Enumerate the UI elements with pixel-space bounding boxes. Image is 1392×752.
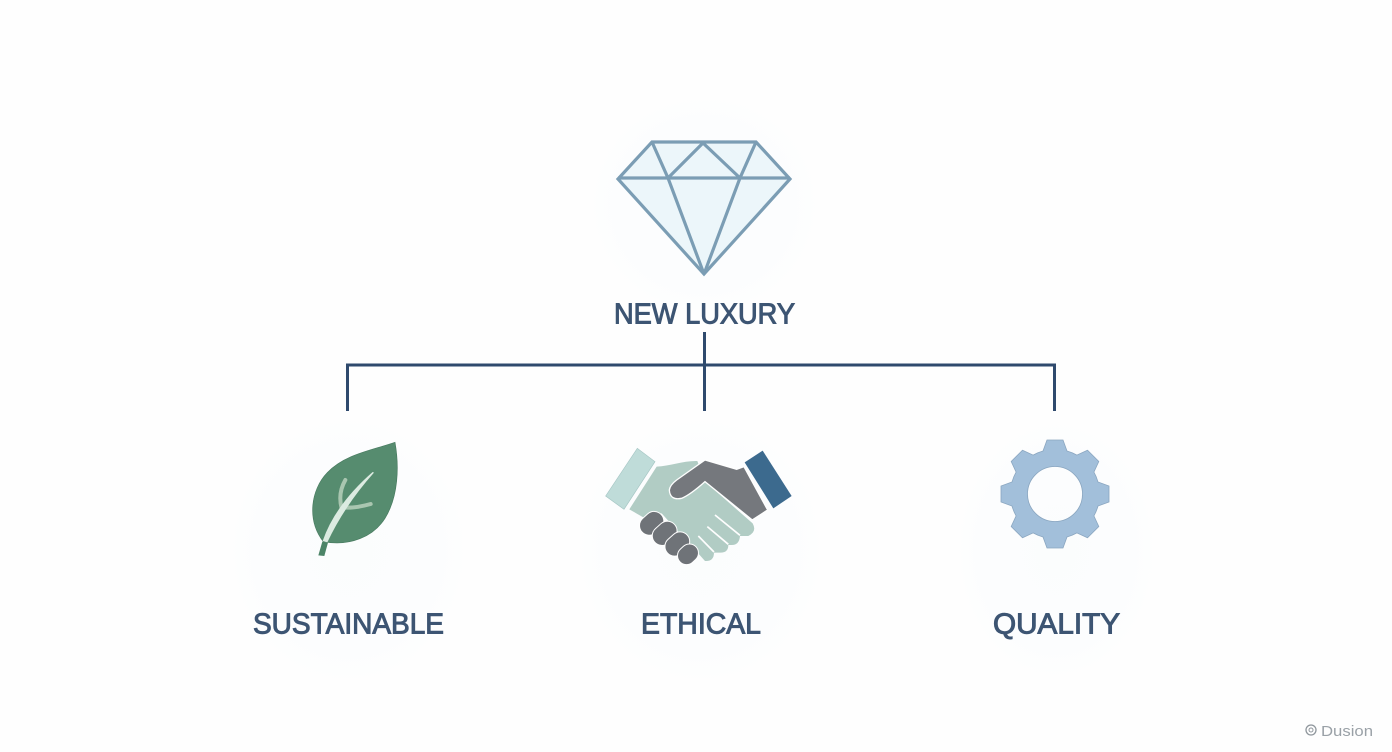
connector tree — [348, 332, 1054, 411]
label: quality: QUALITY — [993, 608, 1120, 640]
watermark: Dusion — [1321, 723, 1373, 740]
icon: leaf — [313, 442, 397, 556]
icon: gear — [1001, 440, 1109, 548]
light hand — [629, 461, 754, 561]
dark hand — [669, 460, 768, 520]
icon: diamond — [617, 142, 791, 275]
light cuff — [606, 448, 655, 509]
watermark — [1306, 723, 1373, 740]
dark cuff — [745, 451, 792, 508]
label: sustainable: SUSTAINABLE — [253, 608, 444, 640]
heading: new luxury: NEW LUXURY — [614, 298, 795, 330]
icon: handshake — [606, 448, 792, 568]
label: ethical: ETHICAL — [641, 608, 761, 640]
knuckles — [636, 507, 702, 568]
